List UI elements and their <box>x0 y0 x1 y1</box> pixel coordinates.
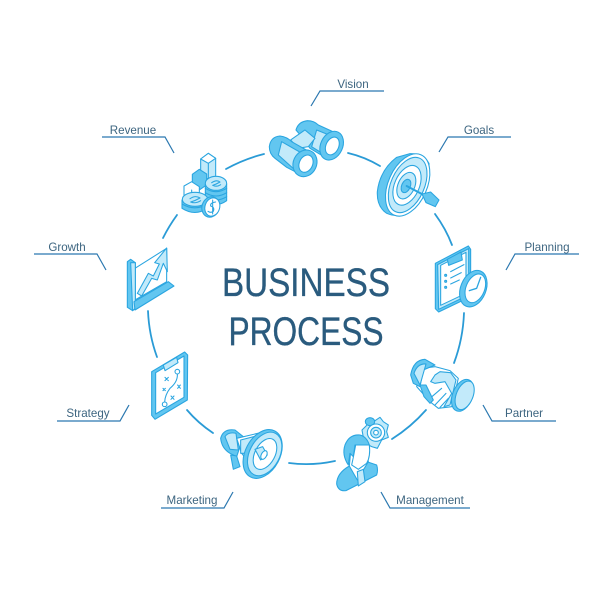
title <box>222 261 390 354</box>
label: Revenue <box>102 124 174 153</box>
label: Strategy <box>57 405 129 421</box>
label: Goals <box>439 124 511 152</box>
icon: revenue bars and coins <box>182 153 227 219</box>
label: Marketing <box>161 492 233 508</box>
label: Vision: Vision <box>337 78 369 91</box>
label: Planning: Planning <box>524 241 570 254</box>
label: Partner <box>483 405 556 421</box>
icon: strategy clipboard <box>152 352 188 419</box>
connecting ring arcs <box>148 153 464 464</box>
label: Marketing: Marketing <box>167 494 217 507</box>
label: Management <box>381 492 470 508</box>
label: Goals: Goals <box>464 124 494 137</box>
icon: manager with gear <box>337 417 388 491</box>
label: Planning <box>506 241 579 270</box>
title: PROCESS <box>228 310 384 354</box>
label: Revenue: Revenue <box>110 124 156 137</box>
icon: growth chart <box>127 248 174 311</box>
label: Growth: Growth <box>48 241 86 254</box>
icon: binoculars <box>269 121 348 181</box>
label: Management: Management <box>396 494 465 507</box>
icon: megaphone <box>221 423 290 485</box>
label: Strategy: Strategy <box>66 407 110 420</box>
label: Partner: Partner <box>505 407 543 420</box>
label: Growth <box>34 241 106 270</box>
icon: planning clipboard and clock <box>435 246 492 312</box>
icon: target with arrow <box>377 147 439 223</box>
label: Vision <box>311 78 384 106</box>
icon: handshake <box>411 359 478 415</box>
title: BUSINESS <box>222 261 390 305</box>
